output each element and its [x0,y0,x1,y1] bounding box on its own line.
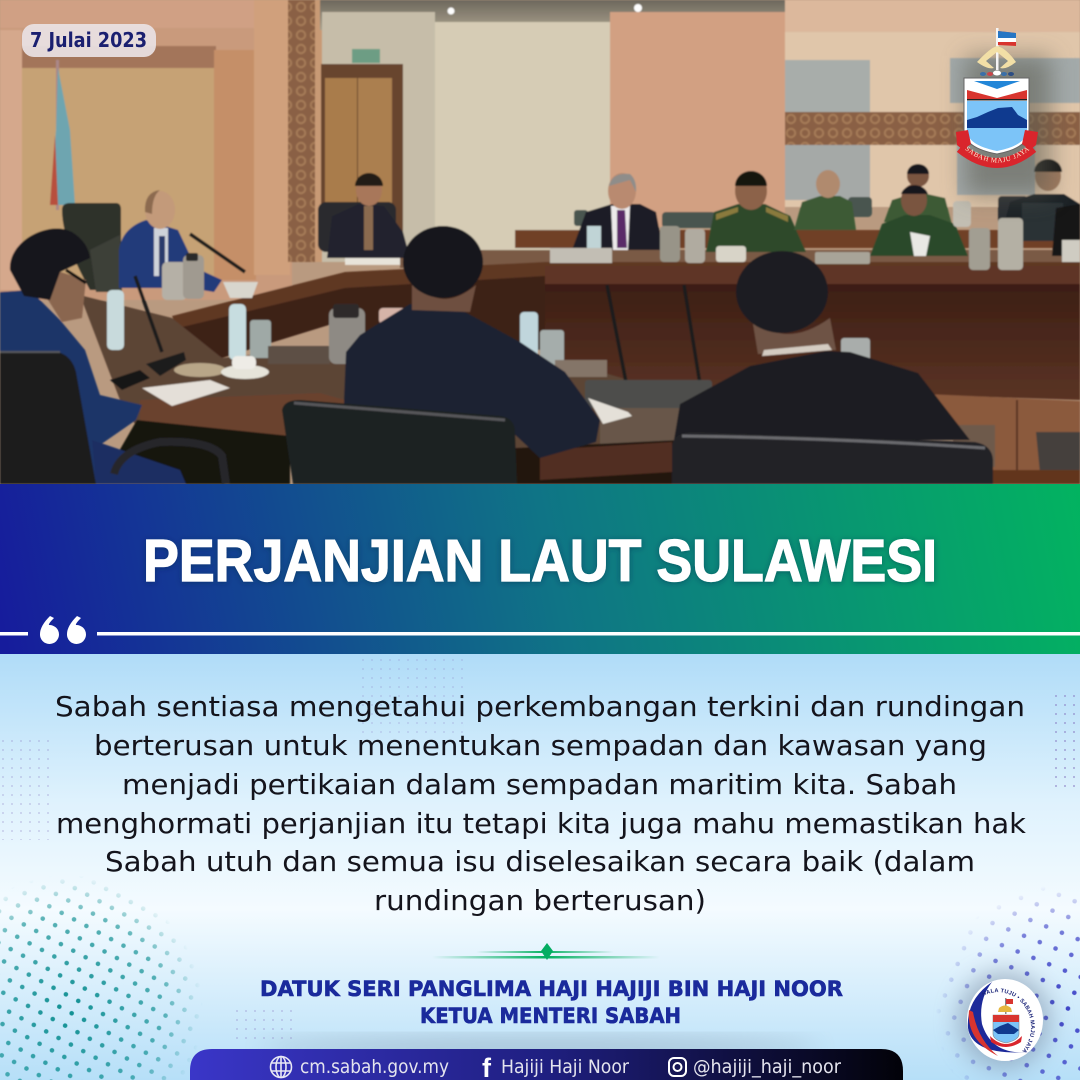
quote text: rundingan berterusan) [374,884,706,917]
quote text: Sabah sentiasa mengetahui perkembangan terkini dan rundingan [55,690,1025,723]
official in dark suit [327,173,410,265]
official in blue suit [119,190,222,292]
foreground man seen from behind, right [674,251,970,440]
door and exit sign [321,49,403,236]
back row chairs [62,196,1028,292]
gradient title band [0,484,1080,654]
quote text: Sabah utuh dan semua isu diselesaikan secara baik (dalam [105,845,975,878]
facebook name: Hajiji Haji Noor [501,1056,629,1078]
officer in green uniform [794,170,856,230]
date badge: 7 Julai 2023 [30,28,147,52]
website: cm.sabah.gov.my [300,1056,449,1078]
flag [50,60,75,210]
date badge [22,24,156,57]
green ornament divider [432,943,660,960]
instagram handle: @hajiji_haji_noor [693,1056,841,1078]
near conference table [80,295,1080,484]
icon: instagram [669,1058,686,1076]
icon: Sabah coat of arms: SABAH MAJU JAYA [965,146,1030,163]
attribution: name and position [260,977,843,1028]
quote divider [0,616,1080,644]
quote text: menjadi pertikaian dalam sempadan maritim kita. Sabah [122,768,957,801]
water bottles, jugs and microphones [107,201,1080,424]
foreground chair at left [0,351,226,484]
foreground man at left [0,228,186,484]
attribution: name and position: DATUK SERI PANGLIMA HAJI HAJIJI BIN HAJI NOOR [260,977,843,1001]
round Sabah logo badge [948,961,1060,1078]
foreground chairs, backs to camera [282,400,993,484]
attribution: name and position: KETUA MENTERI SABAH [420,1004,681,1028]
photo: meeting room with officials around a conference table [0,0,1080,484]
official in suit at right edge [1002,159,1080,256]
icon: globe [270,1056,292,1078]
foreground man seen from behind, centre [344,226,600,458]
round Sabah logo badge: HALA TUJU • SABAH MAJU JAYA [982,988,1035,1052]
quote text [55,690,1027,917]
seated officials in back row [119,159,1080,292]
quote text: berterusan untuk menentukan sempadan dan kawasan yang [94,729,987,762]
icon: Sabah coat of arms [951,28,1065,208]
room walls and ceiling [0,0,1080,300]
official with grey hair and suit [572,173,663,250]
officer in camouflage, front [706,171,806,252]
title: PERJANJIAN LAUT SULAWESI [143,528,937,594]
far conference table [172,230,1080,400]
quote text: menghormati perjanjian itu tetapi kita juga mahu memastikan hak [56,807,1027,840]
quote panel background [0,654,1080,1080]
officers at far right [870,164,968,256]
footer contact bar [190,1039,903,1080]
